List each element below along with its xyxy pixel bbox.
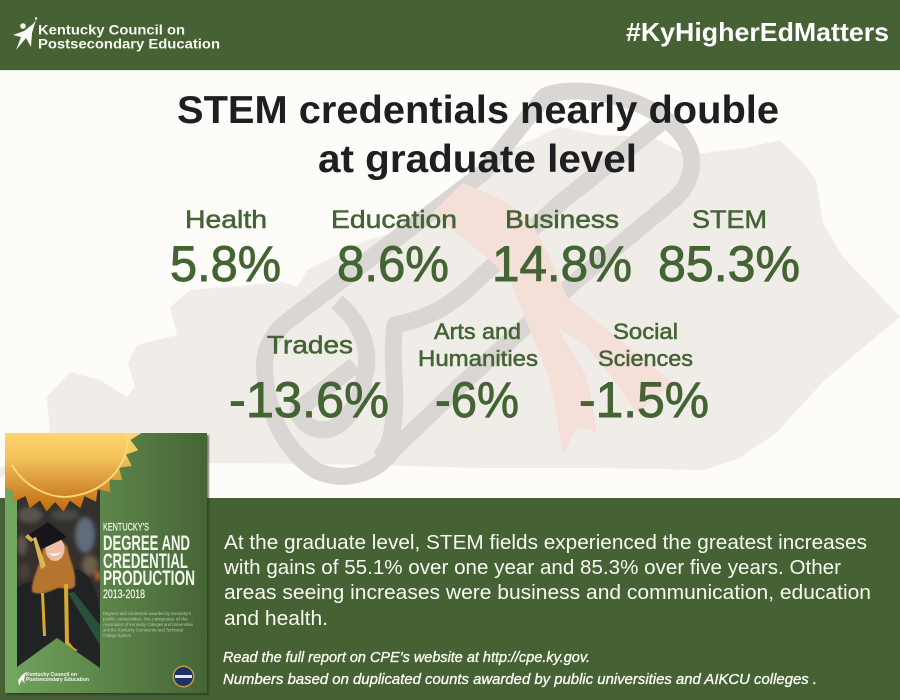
stat: Trades (229, 332, 389, 428)
cover title: DEGREE AND (103, 532, 190, 555)
stat: Arts and Humanities: Arts and (434, 319, 521, 344)
stat: Business: 14.8% (492, 236, 632, 292)
stat: Health: Health (185, 206, 267, 234)
stat: Education (331, 206, 457, 292)
description text: and health. (224, 607, 328, 630)
cover badge (172, 666, 194, 688)
diploma scroll watermark (264, 91, 692, 476)
logo: Kentucky Council on Postsecondary Education (13, 17, 220, 51)
stat: Trades: Trades (267, 332, 353, 360)
stat: STEM (658, 206, 800, 292)
stat: Business: Business (505, 206, 619, 234)
graduate photo (17, 490, 101, 670)
header bar (0, 0, 900, 70)
source note: Numbers based on duplicated counts awarded by public universities and AIKCU colleges . (223, 671, 817, 688)
stat: Business (492, 206, 632, 292)
title (177, 89, 779, 181)
stat: Education: 8.6% (337, 236, 449, 292)
Kentucky state silhouette (0, 127, 900, 478)
stat: Education: Education (331, 206, 457, 234)
title: at graduate level (318, 138, 637, 181)
cover description: and the Kentucky Community and Technical (103, 628, 183, 632)
face (46, 540, 64, 561)
green hood (68, 592, 100, 645)
left ribbon strip (5, 493, 17, 693)
stat: Health (170, 206, 281, 292)
description text: areas seeing increases were business and communication, education (224, 581, 871, 604)
red ribbon watermark (433, 183, 673, 455)
gown (17, 569, 100, 670)
bottom chevron (17, 638, 100, 668)
source note (223, 649, 817, 688)
cover logo (18, 672, 89, 686)
cover title: CREDENTIAL (103, 550, 188, 573)
stat: STEM: 85.3% (658, 236, 800, 292)
stat: Trades: -13.6% (229, 372, 389, 428)
stat: Social Sciences: Social (613, 319, 678, 344)
cover description: Association of Kentucky Colleges and Universities (103, 622, 193, 627)
stat: Social Sciences: -1.5% (579, 372, 709, 428)
logo: Kentucky Council on Postsecondary Education: Kentucky Council on (38, 22, 185, 37)
stat: Arts and Humanities: Humanities (418, 346, 538, 371)
stat: Arts and Humanities: -6% (435, 372, 519, 428)
description text (223, 531, 871, 630)
cover logo: Kentucky Council on (26, 672, 77, 678)
logo: Kentucky Council on Postsecondary Education: Postsecondary Education (38, 36, 220, 51)
description text: with gains of 55.1% over one year and 85.3% over five years. Other (223, 556, 841, 579)
tassel (33, 537, 46, 569)
bottom panel (0, 498, 900, 700)
stat: Social Sciences (579, 319, 709, 428)
description text: At the graduate level, STEM fields experienced the greatest increases (224, 531, 867, 554)
cover description: public universities, the campuses of the (103, 616, 189, 622)
cover description: College System (103, 633, 131, 638)
stat: Health: 5.8% (170, 236, 281, 292)
stat: Social Sciences: Sciences (598, 346, 693, 371)
stole (41, 593, 46, 636)
stat: STEM: STEM (692, 206, 767, 234)
cap (25, 522, 67, 549)
icon: leaping figure (13, 17, 37, 50)
cover description (103, 611, 193, 638)
cover description: Degrees and credentials awarded by Kentucky’s (103, 611, 191, 616)
title: STEM credentials nearly double (177, 89, 779, 132)
report cover booklet (5, 433, 209, 695)
cover title: PRODUCTION (103, 567, 195, 590)
source note: Read the full report on CPE’s website at http://cpe.ky.gov. (223, 649, 590, 666)
gold seal (5, 433, 142, 512)
hair (32, 541, 75, 593)
cover title (103, 522, 195, 601)
stat: Arts and Humanities (418, 319, 538, 428)
cover title: KENTUCKY’S (103, 522, 149, 534)
hashtag: #KyHigherEdMatters (626, 17, 889, 47)
cover title: 2013-2018 (103, 587, 145, 601)
cover logo: Postsecondary Education (26, 677, 89, 683)
